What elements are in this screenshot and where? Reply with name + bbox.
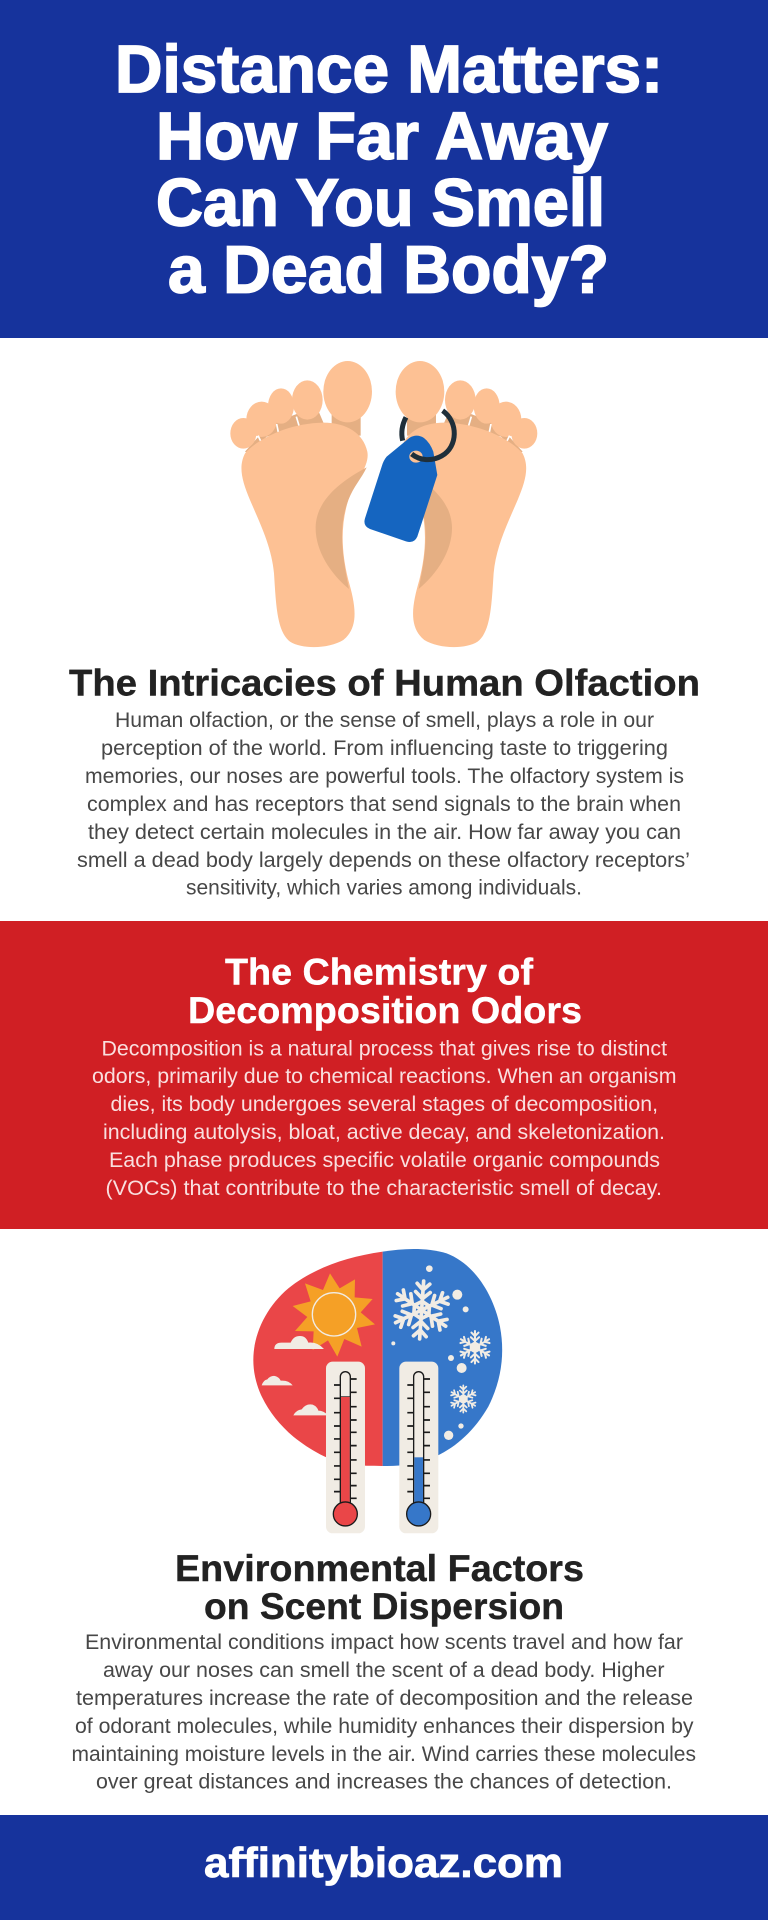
panel: header — [0, 0, 768, 338]
title: How Far Away — [156, 99, 608, 174]
panel: chemistry of decomposition — [0, 921, 768, 1229]
icon: small snowflake — [450, 1385, 477, 1413]
body text: Human olfaction, or the sense of smell, plays a role in our — [115, 709, 654, 732]
title: Distance Matters: — [115, 32, 663, 107]
body text: including autolysis, bloat, active decay, and skeletonization. — [103, 1121, 665, 1144]
left foot — [230, 361, 372, 647]
heading — [188, 952, 582, 1031]
body text: dies, its body undergoes several stages of decomposition, — [110, 1093, 658, 1116]
body text: over great distances and increases the chances of detection. — [96, 1770, 672, 1794]
right foot — [396, 361, 537, 647]
body text: (VOCs) that contribute to the characteristic smell of decay. — [106, 1177, 662, 1200]
body text: sensitivity, which varies among individuals. — [186, 876, 582, 900]
heading: The Chemistry of — [225, 952, 534, 992]
icon: hot and cold thermometers — [253, 1249, 502, 1533]
title — [115, 32, 663, 308]
icon: toe tag — [364, 411, 454, 542]
panel: human olfaction — [69, 361, 700, 899]
heading — [175, 1548, 584, 1627]
body text — [72, 1631, 696, 1794]
icon: feet with toe tag — [230, 361, 537, 647]
icon: sun — [293, 1273, 375, 1357]
icon: medium snowflake — [459, 1331, 491, 1364]
icon: cold thermometer — [399, 1362, 438, 1533]
body text: of odorant molecules, while humidity enhances their dispersion by — [75, 1715, 694, 1738]
icon: snow dots — [391, 1265, 469, 1440]
body text: they detect certain molecules in the air. How far away you can — [88, 821, 681, 844]
icon: hot thermometer — [326, 1362, 365, 1533]
panel: environmental factors — [72, 1249, 696, 1794]
title: Can You Smell — [156, 166, 605, 240]
hot half — [253, 1252, 383, 1466]
panel: footer — [0, 1815, 768, 1920]
body text: temperatures increase the rate of decomposition and the release — [76, 1687, 693, 1710]
body text — [92, 1038, 676, 1200]
body text: Environmental conditions impact how scents travel and how far — [85, 1631, 683, 1654]
title: a Dead Body? — [168, 232, 609, 308]
heading: The Intricacies of Human Olfaction — [69, 662, 700, 704]
body text: Decomposition is a natural process that gives rise to distinct — [102, 1038, 667, 1060]
body text: complex and has receptors that send signals to the brain when — [87, 793, 681, 816]
body text: perception of the world. From influencing taste to triggering — [101, 737, 668, 760]
body text: maintaining moisture levels in the air. Wind carries these molecules — [72, 1743, 696, 1766]
icon: large snowflake — [391, 1279, 452, 1341]
cold half — [383, 1249, 502, 1466]
body text: memories, our noses are powerful tools. The olfactory system is — [85, 765, 684, 788]
body text: away our noses can smell the scent of a dead body. Higher — [103, 1659, 664, 1682]
heading: Environmental Factors — [175, 1548, 584, 1589]
website url: affinitybioaz.com — [204, 1839, 563, 1886]
body text: Each phase produces specific volatile organic compounds — [109, 1149, 660, 1172]
heading: Decomposition Odors — [188, 990, 582, 1031]
icon: clouds — [262, 1336, 328, 1415]
body text: odors, primarily due to chemical reactions. When an organism — [92, 1065, 676, 1088]
body text — [77, 709, 690, 900]
heading: on Scent Dispersion — [204, 1586, 564, 1627]
body text: smell a dead body largely depends on these olfactory receptors’ — [77, 849, 690, 872]
